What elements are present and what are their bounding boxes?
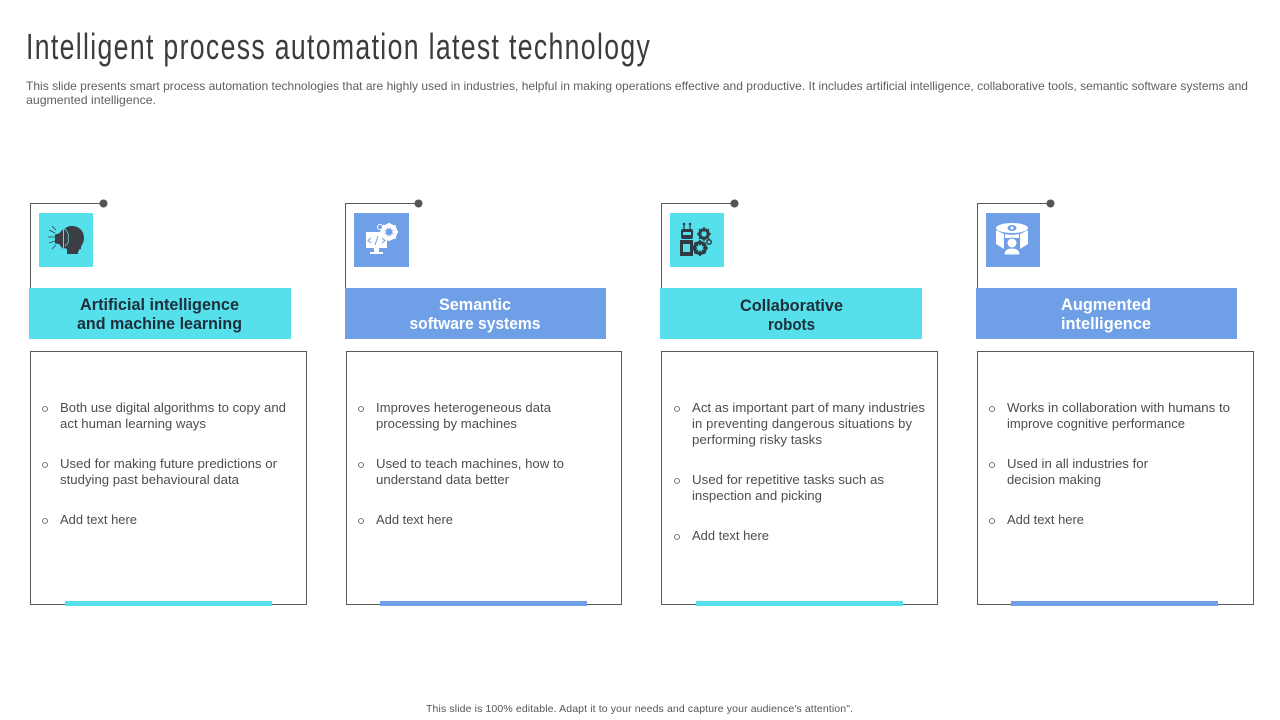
- text box: Both use digital algorithms to copy and: [60, 400, 286, 415]
- text box: inspection and picking: [692, 488, 822, 503]
- text box: Used to teach machines, how to: [376, 456, 564, 471]
- heading bar: [660, 288, 922, 339]
- footer note: This slide is 100% editable. Adapt it to your needs and capture your audience's attention".: [426, 703, 853, 715]
- heading bar: intelligence: [1061, 315, 1151, 333]
- heading bar: and machine learning: [77, 315, 242, 333]
- text box: Add text here: [1007, 512, 1084, 527]
- heading bar: software systems: [410, 315, 540, 333]
- connector with dot: [30, 200, 108, 288]
- text box: in preventing dangerous situations by: [692, 416, 912, 431]
- text box: act human learning ways: [60, 416, 206, 431]
- text box: [662, 352, 938, 606]
- panel: augmented intelligence: [976, 200, 1254, 606]
- panel: semantic software systems: [345, 200, 622, 606]
- subtitle description: [26, 79, 1248, 107]
- heading bar: Semantic: [439, 296, 511, 314]
- heading bar: Augmented: [1061, 296, 1151, 314]
- text box: Used in all industries for: [1007, 456, 1149, 471]
- connector with dot: [978, 200, 1054, 288]
- heading bar: [976, 288, 1237, 339]
- text box: [30, 352, 306, 606]
- text box: Used for repetitive tasks such as: [692, 472, 885, 487]
- text box: processing by machines: [376, 416, 517, 431]
- text box: performing risky tasks: [692, 432, 823, 447]
- text box: Used for making future predictions or: [60, 456, 278, 471]
- subtitle description: augmented intelligence.: [26, 93, 156, 107]
- connector with dot: [662, 200, 738, 288]
- text box: [978, 352, 1254, 606]
- text box: Act as important part of many industries: [692, 400, 926, 415]
- heading bar: Collaborative: [740, 297, 843, 315]
- text box: studying past behavioural data: [60, 472, 240, 487]
- text box: Add text here: [376, 512, 453, 527]
- text box: improve cognitive performance: [1007, 416, 1185, 431]
- heading bar: robots: [768, 316, 815, 334]
- text box: Add text here: [60, 512, 137, 527]
- text box: [346, 352, 622, 606]
- subtitle description: This slide presents smart process automation technologies that are highly used in industries, helpful in making operations effective and productive. It includes artificial intelligence, collaborative tools, semantic software systems and: [26, 79, 1248, 93]
- heading bar: [345, 288, 606, 339]
- text box: Add text here: [692, 528, 769, 543]
- icon: monitor with code and gear: [354, 213, 409, 267]
- icon: person in immersive ring with eye: [986, 213, 1040, 267]
- icon: robot and gears: [670, 213, 724, 267]
- title: Intelligent process automation latest technology: [26, 26, 650, 67]
- icon: head with signal: [39, 213, 93, 267]
- heading bar: Artificial intelligence: [80, 296, 239, 314]
- panel: artificial intelligence: [29, 200, 306, 606]
- connector with dot: [346, 200, 422, 288]
- text box: Improves heterogeneous data: [376, 400, 552, 415]
- panel: collaborative robots: [660, 200, 938, 606]
- text box: understand data better: [376, 472, 510, 487]
- text box: Works in collaboration with humans to: [1007, 400, 1230, 415]
- heading bar: [29, 288, 291, 339]
- text box: decision making: [1007, 472, 1101, 487]
